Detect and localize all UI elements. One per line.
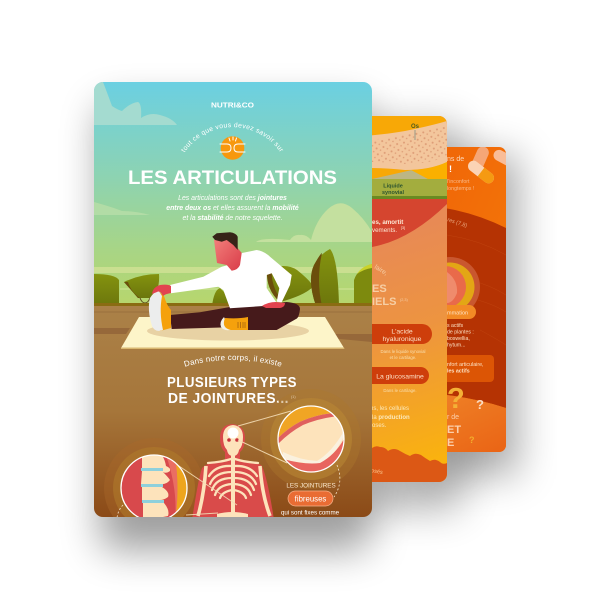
scalloped footer (372, 446, 447, 482)
bushes (94, 249, 372, 306)
text: intro paragraph: et la stabilité de notre squelette. (182, 215, 283, 222)
text: footer: osés (371, 468, 383, 476)
label: synovial fluid: synovial (382, 190, 404, 196)
text: intro paragraph (166, 195, 299, 222)
heading: essential nutrients (372, 264, 408, 305)
pill: glucosamine (372, 367, 429, 384)
box: joint comfort: les actifs (447, 368, 470, 374)
red cartilage wave (372, 199, 447, 247)
yoga mat (121, 317, 344, 349)
heading: essential nutrients: IELS (372, 296, 396, 308)
spine and ribs (208, 456, 258, 512)
text: cells production: la production (372, 415, 410, 421)
text: fibrous description: qui sont fixes comme (281, 510, 340, 516)
clouds (94, 82, 372, 290)
text: bottom of back card: E (447, 437, 454, 449)
text: bottom of back card: r de (447, 414, 459, 421)
pelvis (217, 512, 248, 520)
text: active ingredients: s actifs (447, 323, 464, 329)
text: cells production: ns, les cellules (370, 406, 409, 412)
connector lines (173, 411, 291, 515)
knee illustration (447, 257, 480, 306)
label: synovial fluid: Liquide (383, 184, 403, 190)
text: section label: res (7,8) (446, 217, 468, 229)
text: bottom of back card: ET (447, 424, 461, 436)
pill: hyaluronic acid: L'acide (391, 328, 413, 336)
text: cushions movements: [3] (401, 226, 405, 230)
pill: inflammation (447, 305, 476, 319)
question marks: ? (447, 383, 465, 415)
text: hyaluronic acid location: Dans le liquide synovial (381, 349, 425, 354)
heading: types of joints: DE JOINTURES... (168, 391, 289, 407)
sweater (170, 250, 292, 308)
drop shadow of the card stack (100, 105, 518, 550)
box: joint comfort (447, 355, 494, 382)
pill: hyaluronic acid: hyaluronique (383, 336, 422, 343)
label: bone: Os (411, 124, 420, 130)
text: cells production (372, 406, 410, 427)
hair (212, 232, 238, 250)
text: active ingredients (447, 323, 474, 348)
pill: fibrous (288, 491, 333, 506)
magnifier: cartilaginous joint (121, 455, 187, 521)
lower orange section (447, 395, 506, 452)
text: active ingredients: boswellia, (447, 336, 470, 342)
text: cushions movements (372, 220, 405, 232)
question marks: ? (469, 435, 474, 445)
sneaker: raised foot (149, 290, 171, 331)
panel: middle card (372, 116, 447, 482)
question marks: ? (476, 397, 484, 412)
pill: fibrous: fibreuses (295, 494, 326, 504)
text: bottom of back card (448, 414, 461, 446)
text: curved lead-in: Dans notre corps, il existe (184, 356, 282, 367)
sky background (94, 82, 372, 307)
text: hyaluronic acid location: et le cartilage. (390, 355, 416, 360)
panel: front card (94, 82, 372, 517)
text: curved subtitle: tout ce que vous devez savoir sur (181, 122, 284, 152)
magnifier halos (104, 389, 361, 538)
text: top of back card: l'inconfort (447, 179, 470, 185)
title: LES ARTICULATIONS (128, 167, 337, 189)
sneaker: folded foot (220, 317, 248, 330)
text: top of back card (447, 156, 474, 192)
heading: types of joints: (1) (291, 395, 296, 399)
pill capsule icons (468, 147, 506, 184)
label: bone (411, 124, 420, 140)
face and neck (214, 240, 242, 271)
synovial fluid layer (372, 179, 447, 199)
text: active ingredients: hytum... (447, 342, 465, 348)
man stretching (149, 232, 300, 331)
ground (94, 303, 372, 517)
heading: types of joints: PLUSIEURS TYPES (167, 375, 297, 391)
heading: types of joints (167, 375, 297, 407)
dark red section (447, 208, 506, 408)
hands (152, 285, 171, 296)
icon: joint (220, 136, 245, 160)
text: cells production: oses. (372, 423, 387, 429)
text: brand: NUTRI&CO (211, 100, 254, 110)
heading: essential nutrients: ES (372, 283, 387, 295)
label: synovial fluid (382, 184, 404, 196)
orange top and bone layers (372, 116, 447, 179)
trousers (170, 302, 300, 330)
text: cushions movements: vements. (372, 227, 397, 234)
text: intro paragraph: Les articulations sont des jointures (178, 195, 287, 202)
text: intro paragraph: entre deux os et elles assurent la mobilité (166, 205, 299, 212)
text: top of back card: longtemps ! (447, 186, 474, 192)
text: joints label: LES JOINTURES (286, 482, 336, 490)
text: glucosamine location: Dans le cartilage. (383, 388, 417, 393)
magnifier: fibrous joint (278, 400, 344, 472)
text: cushions movements: es, amortit (372, 219, 403, 226)
box: joint comfort: nfort articulaire, (447, 362, 484, 368)
heading: essential nutrients: (2,3) (400, 298, 409, 302)
arm bones (198, 466, 270, 516)
heading: essential nutrients: laire, (373, 264, 389, 277)
text: hyaluronic acid location (381, 349, 425, 360)
panel: back card (447, 147, 506, 452)
text: top of back card: ns de (447, 156, 464, 163)
skull (223, 425, 243, 456)
body silhouette (192, 424, 274, 520)
pill: glucosamine: La glucosamine (376, 374, 424, 380)
pill: inflammation: mmation (447, 310, 468, 316)
text: active ingredients: de plantes : (447, 330, 474, 336)
text: top of back card: ! (449, 164, 452, 174)
skeleton figure (192, 424, 274, 520)
dashed callout curves (117, 465, 340, 518)
question marks (448, 388, 484, 443)
pill: hyaluronic acid (372, 324, 432, 344)
